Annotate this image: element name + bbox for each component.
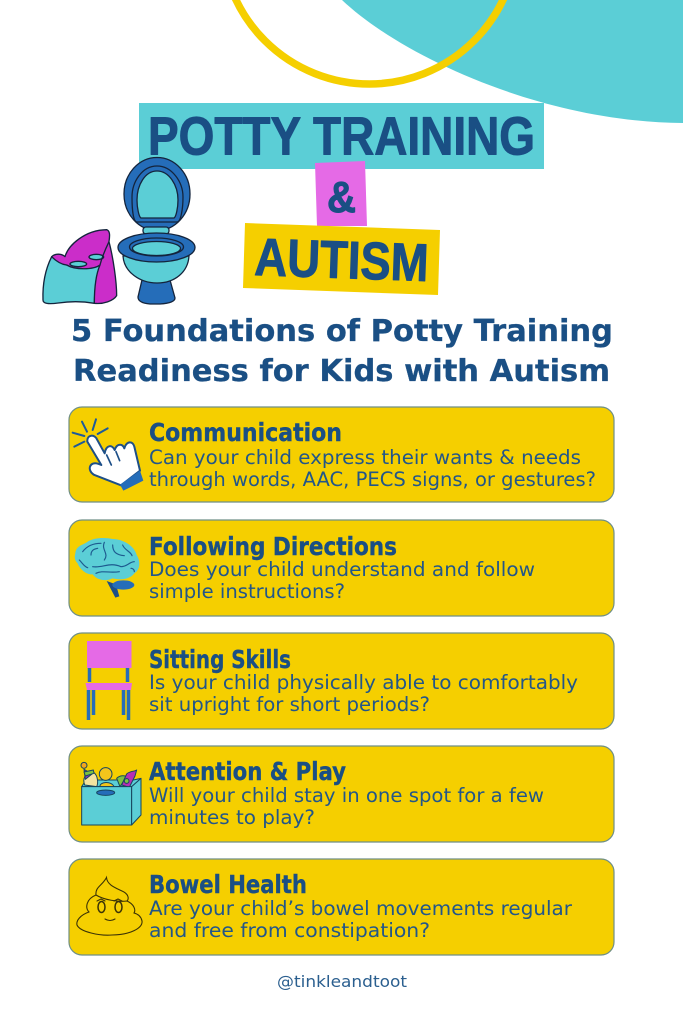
heading: 5 Foundations of Potty Training [71,314,613,349]
panel: following directions: simple instructions? [149,580,345,603]
panel: bowel health: and free from constipation? [149,919,430,942]
yellow ring [222,0,518,84]
icon: chair [86,641,132,720]
panel: communication: through words, AAC, PECS signs, or gestures? [149,468,596,491]
panel: communication: Communication [149,418,342,447]
heading [71,314,613,389]
icon: toy box [81,762,141,825]
footer handle: @tinkleandtoot [277,972,407,991]
panel: following directions: Does your child understand and follow [149,558,535,581]
panel: attention and play: Attention & Play [149,757,346,786]
icon: child potty [43,230,117,304]
title: autism: AUTISM [254,228,430,293]
icon: smiling poop [77,878,142,935]
panel: bowel health [69,859,614,955]
icon: brain [75,538,139,598]
title: ampersand [315,161,367,226]
panel: sitting skills: sit upright for short periods? [149,693,430,716]
panel: sitting skills [69,633,614,729]
panel: bowel health: Are your child’s bowel movements regular [149,897,573,920]
panel: attention and play: Will your child stay in one spot for a few [149,784,544,807]
panel: attention and play: minutes to play? [149,806,315,829]
panel: following directions: Following Directions [149,532,397,561]
heading: Readiness for Kids with Autism [73,354,610,389]
panel: bowel health: Bowel Health [149,870,307,899]
title: ampersand: & [327,173,356,222]
teal corner shape [342,0,683,123]
title: potty training: POTTY TRAINING [148,106,535,166]
panel: attention and play [69,746,614,842]
panel: sitting skills: Sitting Skills [149,645,291,674]
panel: communication: Can your child express their wants & needs [149,446,581,469]
icon: toilet [118,158,195,304]
panel: sitting skills: Is your child physically able to comfortably [149,671,578,694]
panel: following directions [69,520,614,616]
panel: communication [69,407,614,502]
icon: pointing hand [73,419,143,491]
